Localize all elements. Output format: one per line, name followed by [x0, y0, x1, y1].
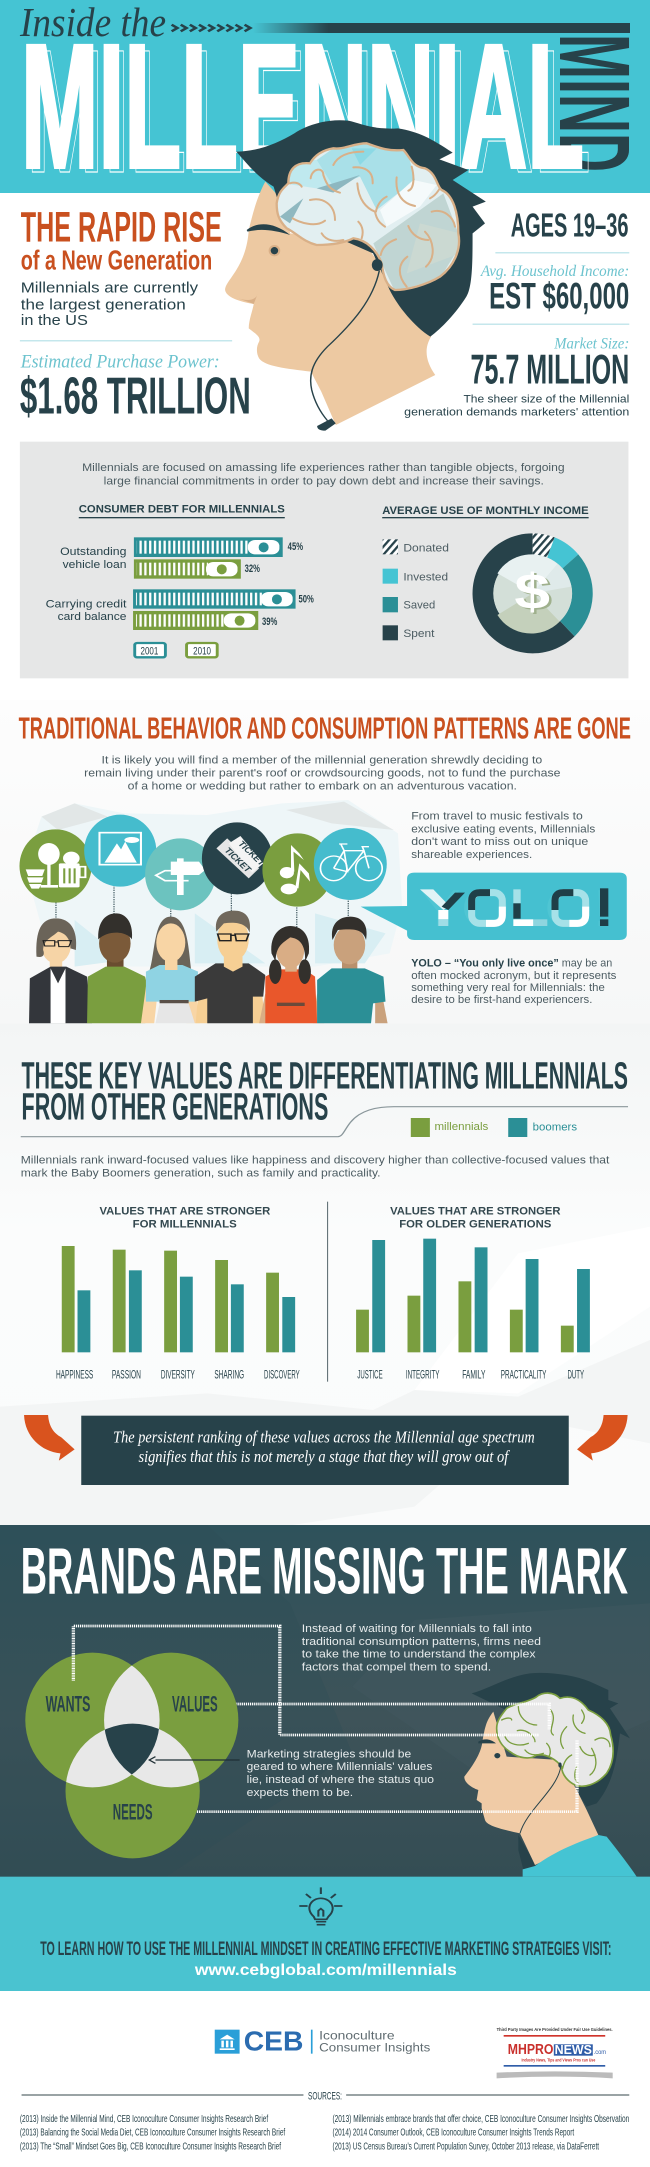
chart: stronger for older generations: DUTY: [568, 1368, 584, 1381]
person: man in teal: [317, 917, 388, 1023]
chart: stronger for older generations: VALUES THAT ARE STRONGER: [390, 1205, 560, 1217]
text: largest generation: [21, 280, 199, 329]
legend: millennials: [434, 1120, 488, 1133]
section: the rapid rise: $1.68 TRILLION: [20, 367, 251, 425]
intro text: [82, 461, 565, 487]
logo: MHProNews: Industry News, Tips and Views Pros can Use: [521, 2058, 595, 2063]
bar: credit 2010 39%: 39%: [262, 615, 278, 628]
heading: [22, 1055, 628, 1128]
callout: [81, 1416, 569, 1485]
icon: light bulb: [299, 1887, 342, 1925]
heading: of a new generation: of a New Generation: [21, 244, 212, 276]
legend: 2001: 2001: [141, 644, 158, 657]
bar: credit 2001 50%: [133, 589, 314, 609]
section: key values: DISCOVERY: [264, 1368, 300, 1381]
speech bubble: YOLO: YOLO!: [420, 880, 610, 938]
section: the rapid rise: [20, 120, 629, 431]
logo: CEB: [215, 2026, 431, 2057]
chart: income donut: [473, 533, 593, 653]
chart: stronger for older generations: [356, 1205, 590, 1381]
logo: MHProNews: .com: [594, 2050, 606, 2056]
chart: stronger for millennials: [56, 1205, 300, 1381]
intro text: of a home or wedding but rather to embark on an adventurous vacation.: [128, 780, 517, 792]
text: largest generation: in the US: [21, 313, 88, 329]
speech bubble: YOLO: [361, 873, 627, 940]
text: marketing strategies: geared to where Millennials' values: [247, 1760, 432, 1773]
logo: CEB: Iconoculture: [319, 2029, 395, 2042]
bar: vehicle 2010 32%: 32%: [245, 562, 260, 575]
text: instead of waiting: factors that compel them to spend.: [302, 1661, 491, 1673]
text: experiences: shareable experiences.: [411, 848, 532, 861]
chart: debt bars: vehicle loan: [63, 558, 127, 571]
stat: purchase power: Estimated Purchase Power:: [20, 350, 220, 372]
text: largest generation: Millennials are currently: [21, 280, 199, 296]
text: largest generation: the largest generation: [21, 297, 186, 313]
legend: [411, 1118, 577, 1137]
heading: monthly income: AVERAGE USE OF MONTHLY INCOME: [382, 504, 589, 517]
legend: boomers: [533, 1121, 577, 1133]
bar: vehicle 2010 32%: [134, 559, 260, 579]
logo: MHProNews: [497, 2027, 613, 2078]
icon: picture: [84, 815, 156, 887]
person: woman in orange dress: [259, 926, 324, 1023]
legend: monthly income: Spent: [403, 627, 435, 640]
title: Inside the: Inside the: [19, 0, 166, 45]
person: woman in blue: [141, 917, 200, 1023]
stat: household income: [480, 263, 629, 316]
chart: debt bars: Outstanding: [60, 545, 127, 558]
call to action: [40, 1937, 611, 1979]
logo: MHProNews: NEWS: [555, 2042, 592, 2058]
icon: music: [262, 833, 333, 907]
text: instead of waiting: traditional consumption patterns, firms need: [302, 1635, 541, 1648]
text: YOLO definition: often mocked acronym, but it represents: [411, 969, 616, 982]
bar: vehicle 2001 45%: [134, 537, 303, 557]
sources list: left: (2013) Balancing the Social Media Diet, CEB Iconoculture Consumer Insights Research Brief: [20, 2127, 286, 2138]
text: marketing strategies: lie, instead of where the status quo: [247, 1773, 434, 1786]
legend: 2001: [135, 643, 165, 657]
intro text: It is likely you will find a member of the millennial generation shrewdly deciding to: [102, 754, 542, 766]
chart: stronger for older generations: PRACTICALITY: [501, 1368, 546, 1381]
chart: stronger for older generations: FOR OLDER GENERATIONS: [399, 1218, 551, 1230]
stat: market size: Market Size:: [553, 335, 629, 352]
chart: stronger for older generations: FAMILY: [462, 1368, 485, 1381]
bar: vehicle 2001 45%: 45%: [288, 540, 303, 553]
legend: monthly income: [383, 539, 449, 640]
heading: consumer debt: CONSUMER DEBT FOR MILLENNIALS: [79, 503, 285, 515]
header band: [0, 0, 650, 193]
sources list: left: (2013) The “Small” Mindset Goes Big, CEB Iconoculture Consumer Insights Research Brief: [20, 2140, 281, 2152]
legend: monthly income: Donated: [403, 542, 449, 554]
person: man in black: [195, 911, 265, 1023]
strings: [56, 885, 348, 927]
icon: bicycle: [314, 828, 387, 900]
icon: dollar sign: $: [517, 565, 553, 621]
text: experiences: don't want to miss out on unique: [411, 835, 588, 848]
intro text: [21, 1154, 610, 1179]
section: call to action and sources: [0, 1877, 650, 2152]
legend: monthly income: Invested: [403, 571, 448, 583]
text: experiences: From travel to music festivals to: [411, 810, 583, 822]
logo: CEB: Consumer Insights: [319, 2041, 431, 2054]
venn diagram: NEEDS: [113, 1801, 153, 1825]
section: key values: [0, 1023, 650, 1525]
venn diagram: VALUES: [172, 1693, 218, 1717]
icon: tickets: TICKET: [222, 846, 254, 874]
sources list: left: [20, 2113, 286, 2152]
intro text: [84, 754, 561, 792]
dotted connectors: [73, 1626, 577, 1812]
heading: sources: SOURCES:: [308, 2089, 342, 2102]
text: marketing strategies: Marketing strategies should be: [247, 1748, 411, 1760]
man with brain: [464, 1673, 637, 1877]
legend: 2010: [187, 643, 217, 657]
text: marketing strategies: [247, 1748, 434, 1799]
venn diagram: WANTS: [46, 1693, 90, 1717]
person: man in green: [87, 913, 154, 1023]
text: YOLO definition: desire to be first-hand experiencers.: [411, 993, 592, 1006]
chart: debt bars: Carrying credit: [46, 598, 127, 610]
chart: debt bars: card balance: [58, 610, 127, 623]
icon: signpost: [145, 838, 216, 910]
chart: stronger for older generations: INTEGRITY: [406, 1368, 439, 1381]
bar: credit 2001 50%: 50%: [298, 593, 314, 605]
sources list: right: [332, 2113, 629, 2152]
section: the rapid rise: THE RAPID RISE: [21, 204, 222, 251]
icon: food and drink: [19, 829, 92, 903]
chart: stronger for older generations: JUSTICE: [357, 1368, 383, 1381]
bar: credit 2010 39%: [133, 611, 278, 630]
background mountains: [25, 800, 402, 967]
person: woman in blazer: [29, 918, 92, 1023]
chart: stronger for millennials: DIVERSITY: [161, 1368, 195, 1381]
title: MIND rotated: MIND: [538, 34, 650, 172]
intro text: large financial commitments in order to pay down debt and increase their savings.: [104, 475, 544, 487]
sources list: left: (2013) Inside the Millennial Mind, CEB Iconoculture Consumer Insights Research Brief: [20, 2113, 269, 2125]
panel: debt and income: [20, 442, 628, 678]
text: instead of waiting: [302, 1622, 541, 1673]
text: experiences: [411, 810, 595, 861]
stat: market size: [404, 335, 629, 418]
text: YOLO definition: [411, 957, 616, 1006]
man illustration: [225, 120, 486, 431]
text: experiences: exclusive eating events, Millennials: [411, 823, 595, 835]
intro text: Millennials are focused on amassing life experiences rather than tangible objects, forgoing: [82, 461, 565, 474]
chart: stronger for millennials: SHARING: [214, 1368, 244, 1381]
chart: stronger for millennials: VALUES THAT ARE STRONGER: [99, 1205, 270, 1217]
text: instead of waiting: to take the time to understand the complex: [302, 1648, 536, 1660]
text: marketing strategies: expects them to be.: [247, 1786, 353, 1799]
people: [29, 911, 388, 1023]
icon circles: [19, 815, 387, 927]
section: traditional behavior: [0, 700, 650, 1023]
arrow: left: [24, 1415, 75, 1461]
arrow: right: [577, 1415, 628, 1461]
call to action: www.cebglobal.com/millennials: [194, 1961, 457, 1979]
section: brands missing the mark: [0, 1525, 650, 1877]
title rule with chevrons: [172, 23, 630, 33]
chart: stronger for millennials: FOR MILLENNIALS: [133, 1218, 237, 1230]
brain: [497, 1693, 613, 1786]
logo: CEB: CEB: [244, 2026, 303, 2057]
venn diagram: [25, 1653, 238, 1858]
text: instead of waiting: Instead of waiting for Millennials to fall into: [302, 1622, 532, 1635]
chart: debt bars: [46, 537, 314, 657]
text: YOLO definition: YOLO – “You only live once” may be an: [411, 957, 612, 969]
text: YOLO definition: something very real for Millennials: the: [411, 981, 605, 994]
arrow to venn centre: [149, 1757, 240, 1763]
legend: 2010: 2010: [193, 644, 211, 657]
icon: tickets: [202, 822, 272, 894]
stat: market size: generation demands marketers' attention: [404, 406, 629, 418]
brain: [276, 142, 460, 292]
chart: stronger for millennials: HAPPINESS: [56, 1368, 93, 1381]
stat: purchase power: [20, 350, 251, 425]
icon: tickets: TICKET: [236, 839, 268, 868]
legend: monthly income: Saved: [403, 599, 435, 611]
stat: market size: The sheer size of the Millennial: [463, 393, 629, 405]
logo: MHProNews: MHPRO: [508, 2041, 554, 2058]
intro text: mark the Baby Boomers generation, such as family and practicality.: [21, 1167, 381, 1179]
dotted stub above wants: [69, 1653, 77, 1681]
chart: stronger for millennials: PASSION: [112, 1368, 141, 1381]
earphones: [311, 259, 383, 431]
icon: dollar sign: $: [514, 564, 550, 620]
intro text: remain living under their parent's roof or crowdsourcing goods, not to fund the purchase: [84, 767, 561, 779]
